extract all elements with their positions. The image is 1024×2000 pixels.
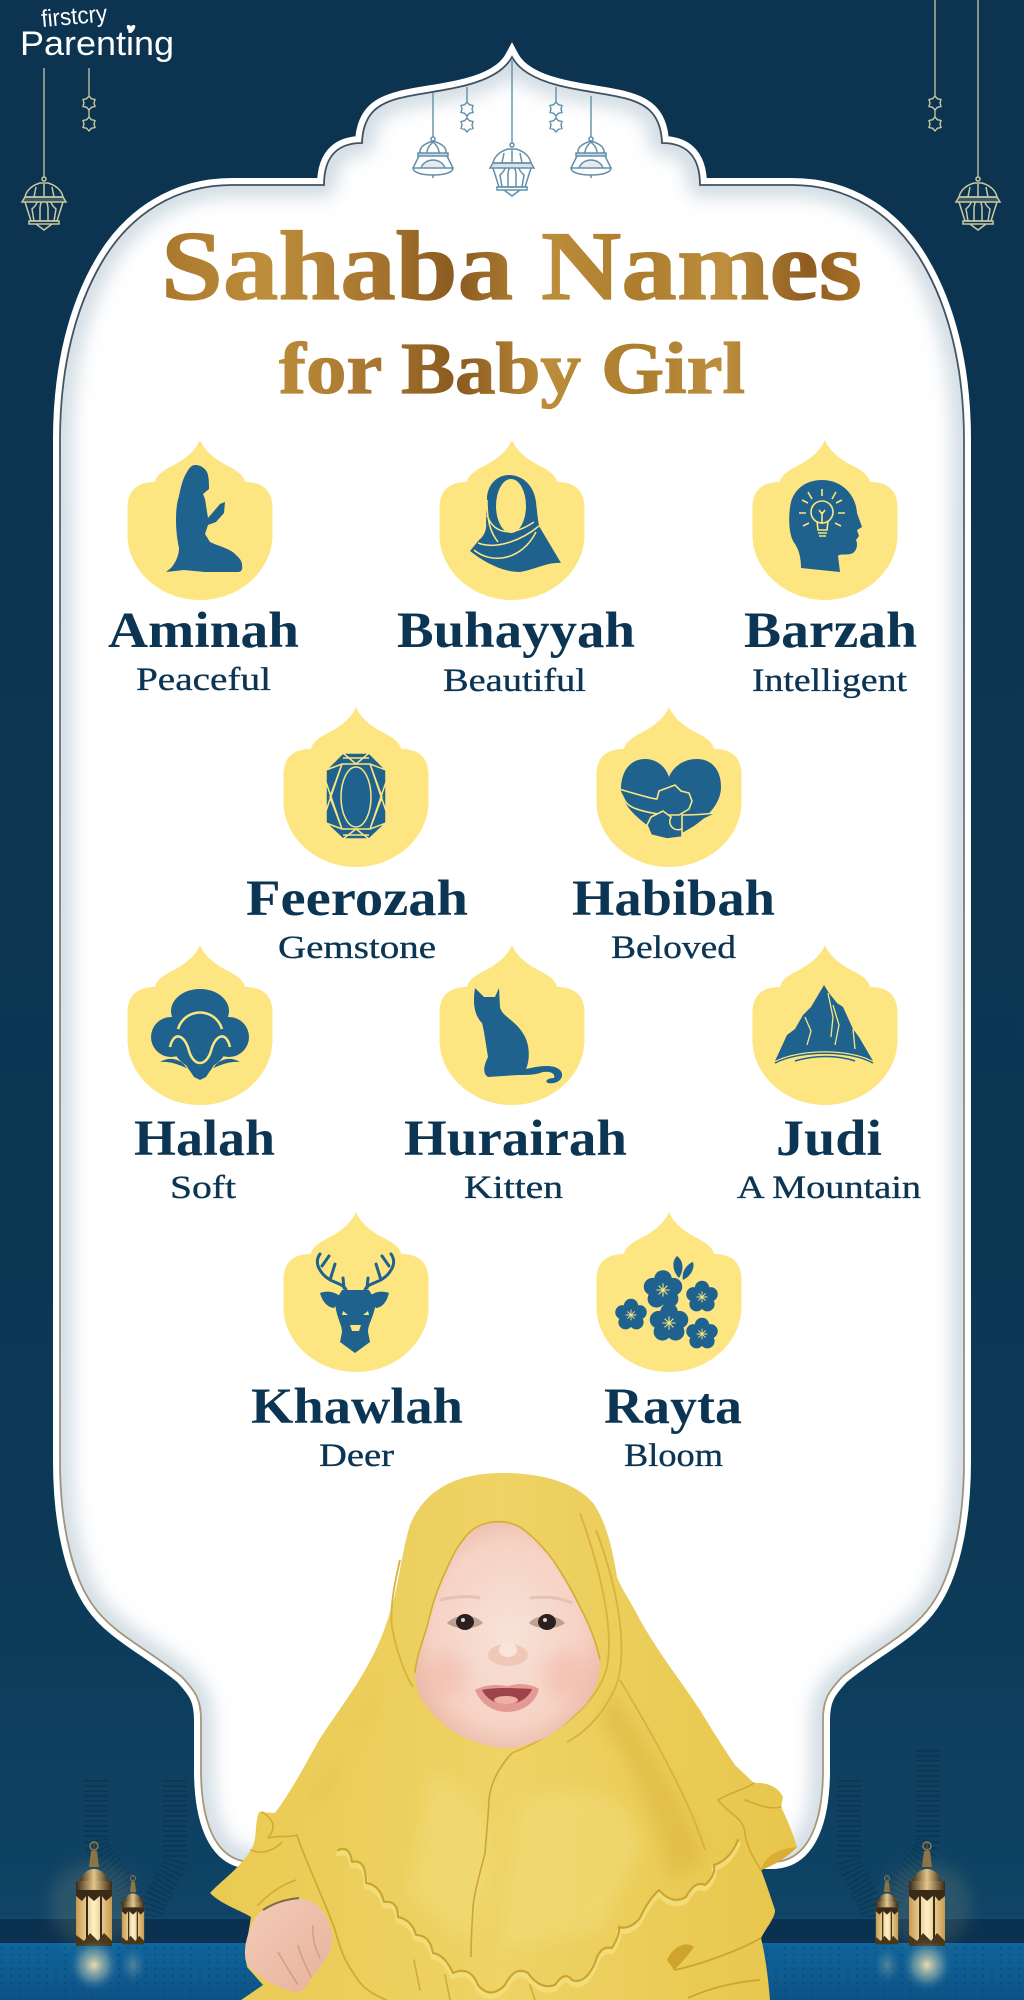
title: Sahaba Names: [161, 212, 862, 321]
hanging stars: right: [929, 0, 941, 131]
hanging lanterns in the arch: [413, 60, 611, 196]
badge: flowers: [596, 1212, 742, 1372]
name card: Habibah: [572, 707, 775, 966]
floor lanterns left: [50, 1841, 147, 1992]
hood rim: [415, 1522, 600, 1673]
name card: Buhayyah: Beautiful: [443, 663, 586, 699]
name card: Buhayyah: [397, 440, 635, 699]
name card: Rayta: Rayta: [604, 1379, 742, 1435]
name card: Habibah: Habibah: [572, 871, 775, 927]
badge: hugged heart: [596, 707, 742, 867]
name card: Rayta: [596, 1212, 742, 1474]
center seam: [471, 1753, 512, 1957]
name card: Halah: Halah: [134, 1111, 275, 1167]
badge: cat: [440, 945, 584, 1105]
hood folds: [391, 1513, 705, 1850]
right sleeve underside: [761, 1847, 797, 1870]
badge: head with light bulb: [752, 440, 898, 600]
badge: gemstone: [284, 707, 428, 867]
face: [415, 1522, 600, 1748]
name card: Judi: Judi: [776, 1111, 882, 1167]
floor lanterns right: [873, 1841, 971, 1992]
hand: [245, 1898, 332, 1992]
name card: Hurairah: Hurairah: [404, 1111, 627, 1167]
name card: Halah: [128, 945, 275, 1206]
badge: mountain: [752, 945, 898, 1105]
logo: [20, 0, 174, 63]
mouth: [475, 1684, 539, 1712]
logo: Parenting: [20, 25, 174, 63]
name card: Khawlah: [251, 1212, 463, 1474]
dress and hijab: [210, 1473, 797, 2000]
cheeks: [423, 1651, 592, 1699]
badge: deer: [284, 1212, 428, 1372]
name card: Rayta: Bloom: [624, 1438, 723, 1474]
name card: Hurairah: [404, 945, 627, 1206]
soft shading on fabric: [300, 1640, 705, 1950]
name card: Habibah: Beloved: [611, 930, 737, 966]
eyebrows: [440, 1597, 572, 1603]
name card: Aminah: [108, 440, 299, 698]
name card: Aminah: Aminah: [108, 603, 299, 659]
title: for Baby Girl: [279, 328, 745, 409]
name card: Barzah: [744, 440, 917, 699]
title: [161, 212, 862, 409]
name card: Hurairah: Kitten: [464, 1170, 563, 1206]
right frill curl: [667, 1944, 694, 1970]
baby girl in yellow hijab: [210, 1473, 797, 2000]
eyes: [447, 1614, 565, 1630]
badge: cotton: [128, 945, 272, 1105]
badge: hijab: [440, 440, 584, 600]
name card: Khawlah: Deer: [319, 1438, 394, 1474]
ruffle band: [251, 1783, 781, 2000]
logo: firstcry: [40, 0, 108, 33]
badge: praying woman: [128, 440, 272, 600]
hanging stars: left: [83, 68, 95, 131]
name card: Feerozah: [246, 707, 468, 966]
name card: Aminah: Peaceful: [136, 662, 271, 698]
name card: Halah: Soft: [170, 1170, 236, 1206]
name card: Judi: [737, 945, 921, 1206]
white arch panel: [60, 57, 964, 1862]
name card: Barzah: Intelligent: [752, 663, 907, 699]
name card: Feerozah: Gemstone: [278, 930, 436, 966]
name card: Khawlah: Khawlah: [251, 1379, 463, 1435]
hanging lantern: far right: [956, 0, 1000, 230]
right lower arm line: [674, 1938, 761, 1998]
name card: Feerozah: Feerozah: [246, 871, 468, 927]
nose: [488, 1643, 528, 1666]
name card: Buhayyah: Buhayyah: [397, 603, 635, 659]
name card: Barzah: Barzah: [744, 603, 917, 659]
hanging lantern: far left: [22, 68, 66, 230]
name card: Judi: A Mountain: [737, 1170, 921, 1206]
